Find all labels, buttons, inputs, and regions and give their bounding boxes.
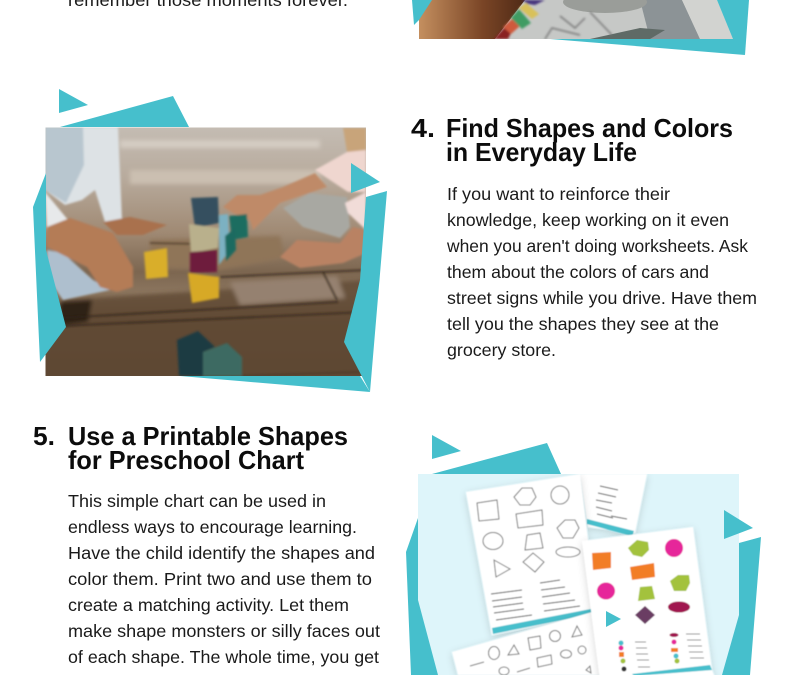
light blue backdrop	[418, 474, 739, 675]
heading: step 4	[411, 113, 733, 167]
text block: step 4 body: tell you the shapes they see at the	[447, 314, 719, 334]
heading: step 5: 5.	[33, 421, 55, 451]
teal side shapes: step 5 image	[406, 518, 761, 675]
panel: step 3 photo	[412, 0, 749, 55]
bottom outline worksheet	[452, 612, 604, 675]
teal frame over step 4 photo	[33, 173, 387, 392]
photo: hand with jar on worksheet	[419, 0, 739, 39]
teal frame: step 3 photo	[412, 0, 749, 55]
text block: step 4 body: them about the colors of cars and	[447, 262, 709, 282]
photo: children playing with wooden blocks	[45, 127, 367, 377]
coloured shapes worksheet	[582, 527, 716, 675]
teal frame behind step 4 photo	[59, 89, 189, 127]
heading: step 5: for Preschool Chart	[68, 445, 304, 475]
text block: step 4 body: grocery store.	[447, 340, 556, 360]
text block: step 5 body: endless ways to encourage learning.	[68, 517, 357, 537]
teal accent triangle: step 5 image	[724, 510, 753, 539]
text block: step 5 body: make shape monsters or silly faces out	[68, 621, 380, 641]
text block: step 5 body: Have the child identify the shapes and	[68, 543, 375, 563]
heading: step 4: in Everyday Life	[446, 137, 637, 167]
text block: step 5 body: create a matching activity. Let them	[68, 595, 349, 615]
text block: step 4 body: If you want to reinforce their	[447, 184, 670, 204]
teal accent triangle: step 4 photo	[351, 163, 380, 193]
text block: step 5 body: color them. Print two and use them to	[68, 569, 372, 589]
text block: step 5 body	[68, 491, 380, 667]
heading: step 4: Find Shapes and Colors	[446, 113, 733, 143]
text block: step 4 body: street signs while you drive. Have them	[447, 288, 757, 308]
panel: step 4 photo	[33, 89, 387, 392]
back worksheet	[580, 474, 647, 536]
teal accent triangle: worksheet	[606, 611, 621, 627]
outline shapes worksheet	[466, 474, 597, 635]
text block: step 4 body	[446, 184, 757, 360]
teal top shapes: step 5 image	[432, 435, 561, 474]
text block: step 4 body: knowledge, keep working on it even	[447, 210, 729, 230]
text block: step 5 body: of each shape. The whole time, you get	[68, 647, 379, 667]
panel: step 5 worksheets image	[406, 435, 761, 675]
worksheets	[452, 474, 716, 675]
heading: step 4: 4.	[411, 113, 435, 143]
heading: step 5: Use a Printable Shapes	[68, 421, 348, 451]
text block: step 5 body: This simple chart can be used in	[68, 491, 326, 511]
heading: step 5	[33, 421, 348, 475]
text block: step 4 body: when you aren't doing worksheets. Ask	[446, 236, 748, 256]
